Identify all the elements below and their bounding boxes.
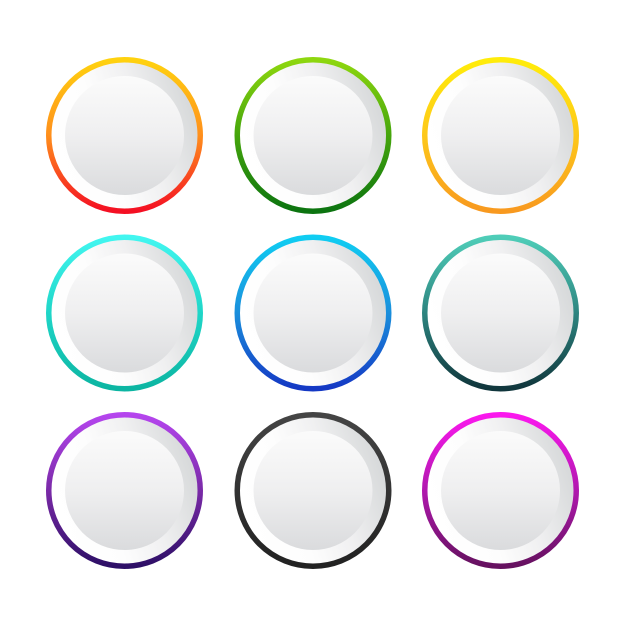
button: teal to dark slate xyxy=(425,237,576,389)
button: magenta to plum xyxy=(425,415,576,566)
button: sky blue to royal blue xyxy=(237,237,389,389)
button: yellow to orange xyxy=(425,60,576,211)
button: purple to indigo xyxy=(49,415,200,566)
button: cyan to teal xyxy=(49,237,200,389)
button: yellow to red xyxy=(49,60,200,211)
button: green xyxy=(237,60,389,211)
button: black xyxy=(237,415,389,566)
